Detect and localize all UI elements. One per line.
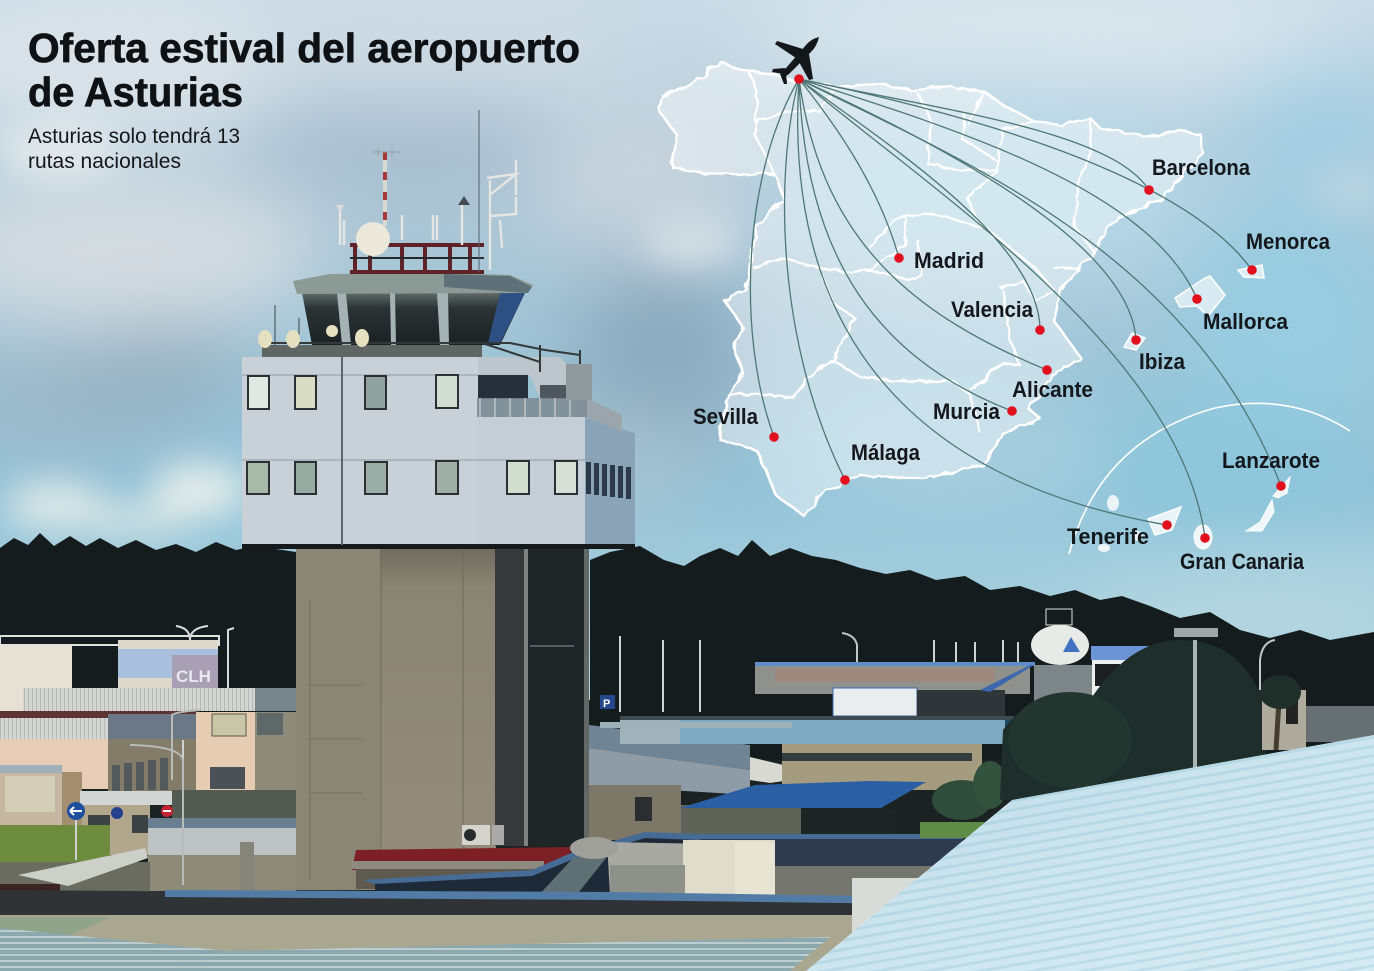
photo: center low buildings	[589, 716, 895, 840]
destination labels	[693, 155, 1331, 574]
destination labels: Gran Canaria	[1180, 549, 1305, 574]
island: Menorca	[1238, 265, 1264, 278]
island: El Hierro	[1098, 544, 1110, 552]
canary islands arc	[1069, 403, 1350, 554]
destination labels: Murcia	[933, 399, 1001, 424]
destination labels: Málaga	[851, 440, 921, 465]
destination labels: Ibiza	[1139, 349, 1186, 374]
destination labels: Menorca	[1246, 229, 1331, 254]
destination labels: Barcelona	[1152, 155, 1251, 180]
photo: right terminal buildings	[600, 609, 1181, 866]
destination labels: Alicante	[1012, 377, 1093, 402]
photo: trees and lamp mast	[600, 628, 1374, 800]
island: Fuerteventura	[1246, 500, 1274, 531]
windows row 2	[247, 461, 577, 494]
icon: airplane	[772, 37, 819, 84]
photo: tower cab and antennas	[258, 110, 592, 400]
windows row 1	[248, 375, 458, 409]
icon: air conditioning unit	[462, 825, 504, 845]
title: Oferta estival del aeropuerto	[28, 25, 580, 71]
icon: no entry sign	[161, 805, 173, 817]
photo: corrugated white roof	[806, 735, 1374, 971]
photo: left airport buildings	[0, 626, 296, 914]
destination labels: Valencia	[951, 297, 1034, 322]
subtitle: rutas nacionales	[28, 150, 181, 173]
island: La Gomera	[1133, 531, 1143, 541]
sphere	[1031, 609, 1089, 665]
icon: satellite dishes	[258, 325, 369, 348]
photo: tower concrete shaft	[296, 546, 589, 890]
island: La Palma	[1107, 495, 1119, 511]
icon: parking sign: P	[603, 698, 610, 710]
icon: parking sign	[600, 695, 615, 710]
photo: foreground wall and rooftops	[0, 832, 1000, 971]
region borders	[730, 72, 1096, 433]
island: Ibiza	[1124, 333, 1145, 350]
map of Spain	[659, 63, 1350, 554]
island: Tenerife	[1148, 507, 1181, 535]
destination labels: Mallorca	[1203, 309, 1289, 334]
destination labels: Lanzarote	[1222, 448, 1320, 473]
destination labels: Sevilla	[693, 404, 759, 429]
icon: direction sign	[67, 802, 85, 820]
destination dots	[769, 74, 1286, 543]
subtitle	[28, 125, 240, 173]
title	[28, 25, 580, 115]
title: de Asturias	[28, 69, 243, 115]
sign: CLH: CLH	[176, 667, 211, 686]
island: Mallorca	[1175, 276, 1225, 316]
route lines	[750, 79, 1281, 538]
island: Lanzarote	[1273, 477, 1290, 498]
photo: dark forest	[0, 533, 1374, 760]
map outline	[659, 63, 1203, 516]
destination labels: Tenerife	[1067, 524, 1149, 549]
destination labels: Madrid	[914, 248, 984, 273]
island: Gran Canaria	[1194, 525, 1212, 549]
photo: control tower upper block	[242, 352, 635, 549]
icon: radome	[356, 222, 390, 256]
subtitle: Asturias solo tendrá 13	[28, 125, 240, 148]
blue roof	[680, 781, 926, 808]
